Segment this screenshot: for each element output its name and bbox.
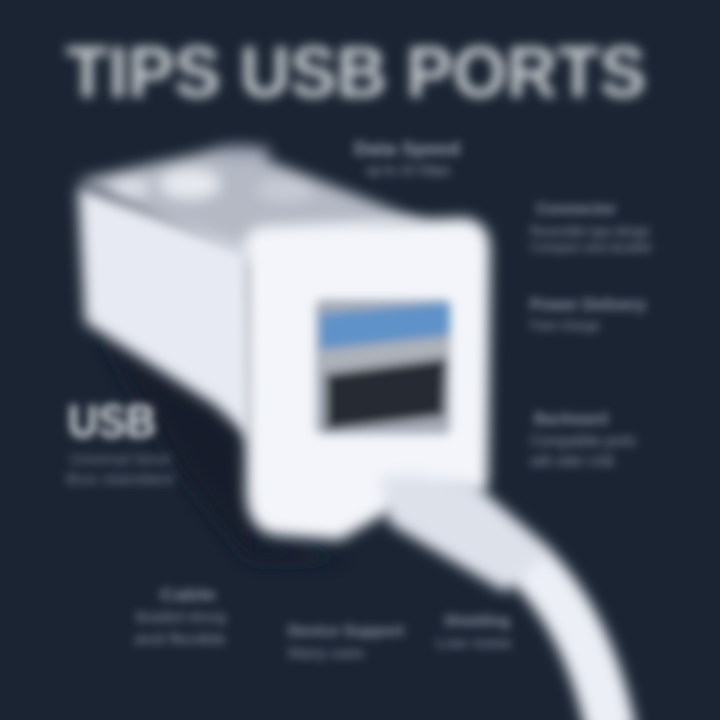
callout: top — [354, 139, 460, 179]
callout: right 3: Backward — [534, 411, 608, 428]
port blue tongue — [320, 302, 450, 350]
callout: bottom right: Shielding — [444, 613, 510, 630]
callout: USB label — [66, 395, 174, 488]
callout: right 1: Connector — [536, 201, 616, 218]
callout: right 1 — [530, 201, 652, 255]
illustration: USB device — [78, 145, 612, 720]
callout: right 2: Fast charge — [530, 317, 600, 333]
callout: USB label: Bus standard — [66, 471, 174, 488]
callout: right 2: Power Delivery — [530, 295, 647, 314]
device left face — [78, 186, 252, 440]
callout: bottom left: Cable — [160, 587, 216, 604]
callout: right 1: Reversible type design — [530, 223, 650, 240]
callout: right 3 — [529, 411, 636, 470]
callout: right 3: Compatible ports — [530, 433, 636, 450]
title: TIPS USB PORTS — [66, 33, 646, 113]
callout: USB label: Universal Serial — [70, 451, 170, 468]
callout: right 1: Compact and durable — [530, 239, 652, 255]
callout: right 3: with older USB — [529, 453, 614, 470]
callout: top: Data Speed — [354, 139, 460, 159]
callout: right 2 — [530, 295, 647, 333]
callout: bottom center — [288, 623, 405, 662]
callout: bottom left: and flexible — [134, 631, 226, 648]
callout: bottom right: Low noise — [436, 635, 512, 652]
device front face — [245, 218, 490, 540]
port frame — [316, 300, 450, 434]
device shadow — [100, 330, 350, 560]
device top face — [78, 145, 430, 262]
callout: bottom left — [134, 587, 226, 648]
port middle band — [320, 336, 450, 372]
callout: bottom center: Many uses — [288, 645, 364, 662]
callout: bottom left: Braided strong — [136, 609, 226, 626]
port black opening — [326, 358, 446, 430]
cable — [380, 476, 612, 720]
callout: USB label: USB — [68, 395, 156, 447]
callout: bottom right — [436, 613, 512, 652]
callout: bottom center: Device Support — [288, 623, 405, 640]
port: USB socket — [316, 300, 450, 434]
callout: top: up to 10 Gbps — [366, 162, 450, 179]
